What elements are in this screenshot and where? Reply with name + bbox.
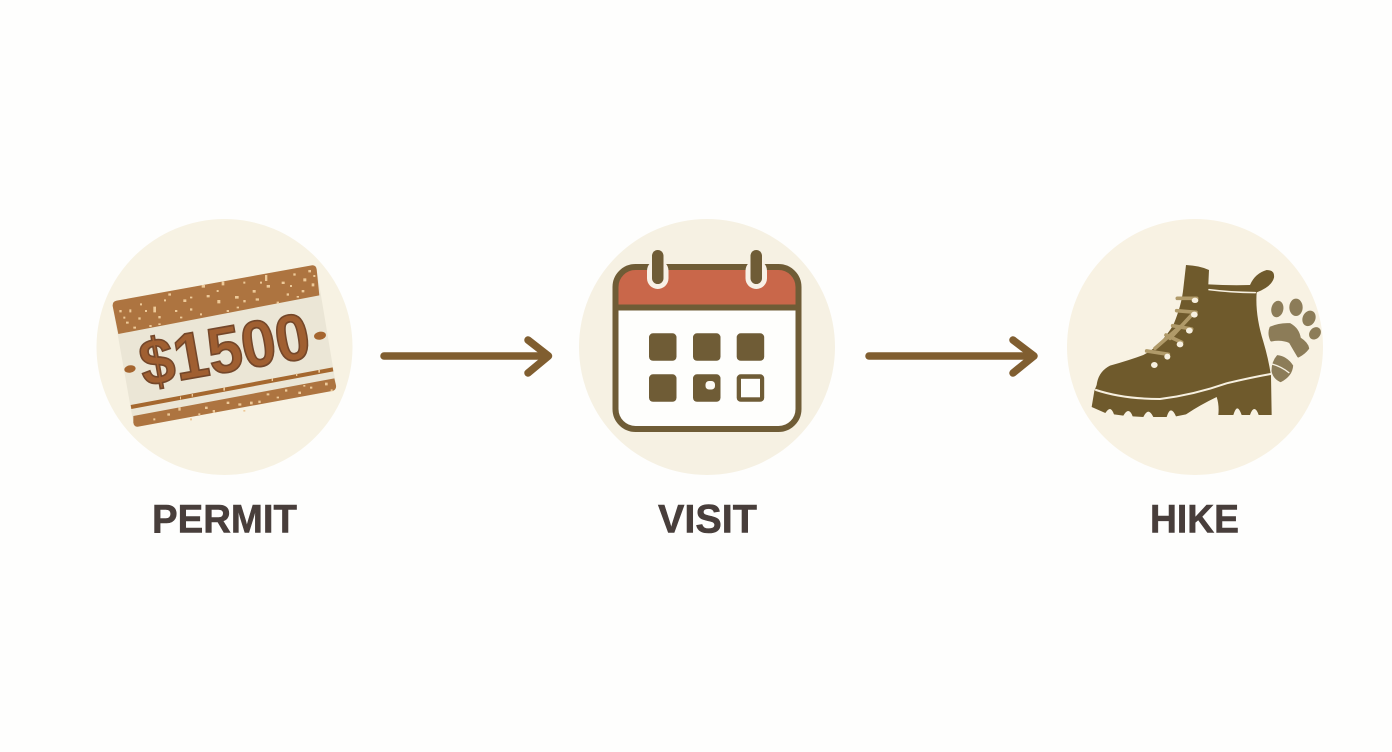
step 3: hike — [1067, 219, 1323, 542]
calendar day squares — [649, 333, 764, 402]
icon: $1500 permit ticket — [113, 265, 336, 427]
icon: calendar — [616, 250, 798, 429]
step 1: permit — [96, 219, 352, 542]
arrow: permit to visit — [384, 340, 548, 373]
ticket amount: $1500 — [134, 299, 315, 400]
circle background: hike — [1067, 219, 1323, 475]
label: permit: PERMIT — [152, 498, 297, 542]
boot laces — [1147, 298, 1197, 354]
arrow: visit to hike — [869, 340, 1034, 373]
calendar rings — [647, 250, 767, 289]
circle background: visit — [579, 219, 835, 475]
icon: hiking boot — [1092, 265, 1323, 417]
step 2: visit — [579, 219, 835, 542]
boot eyelets — [1151, 298, 1198, 368]
ticket speckles — [119, 270, 315, 329]
boot trim lines — [1096, 290, 1271, 399]
label: hike: HIKE — [1150, 498, 1239, 542]
circle background: permit — [96, 219, 352, 475]
label: visit: VISIT — [658, 498, 757, 542]
icon: paw print — [1270, 299, 1323, 382]
